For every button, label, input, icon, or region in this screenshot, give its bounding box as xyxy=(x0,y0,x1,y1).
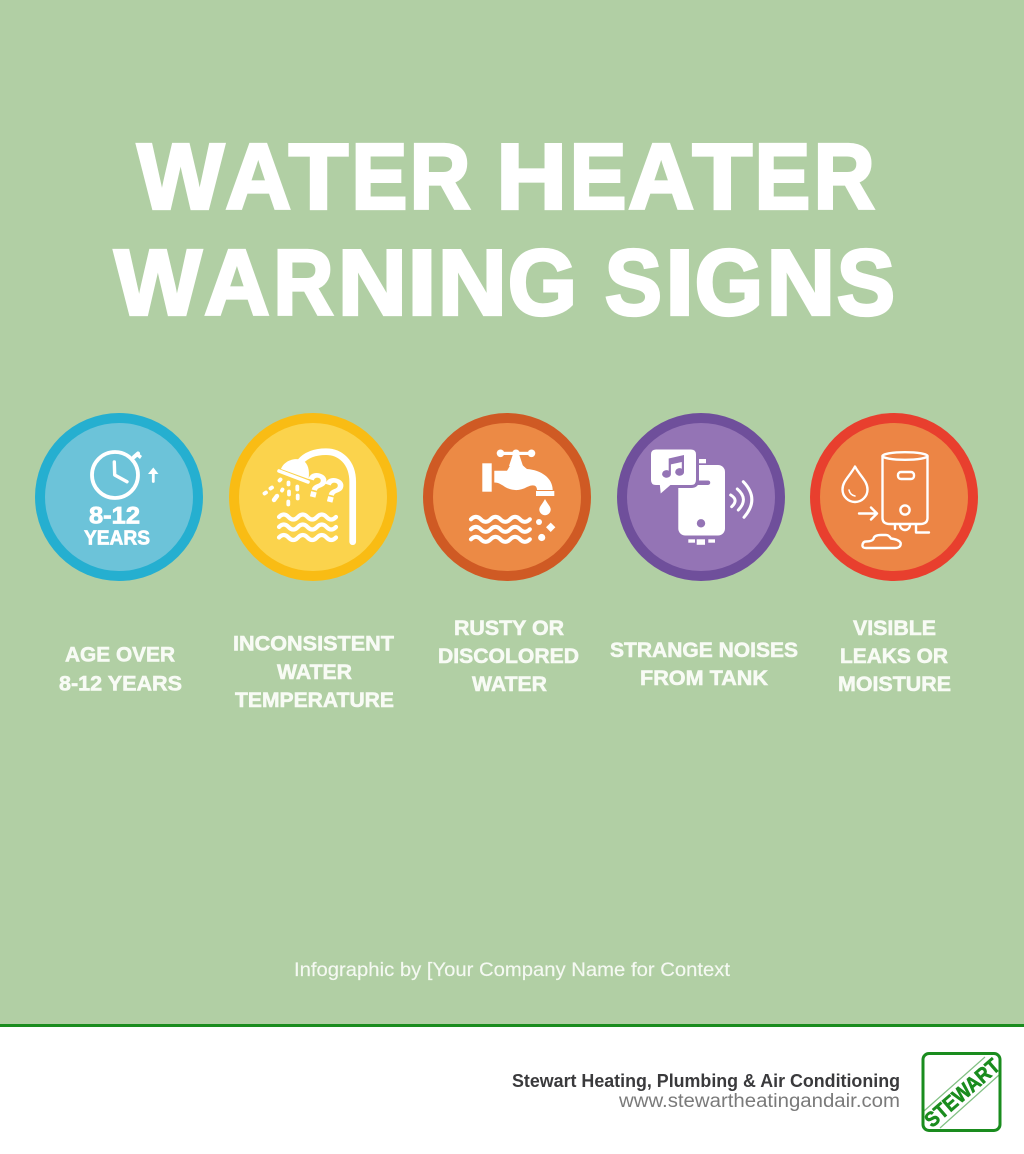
icon: leaking tank badge xyxy=(810,413,978,581)
label: inconsistent temperature: WATER xyxy=(277,660,352,684)
label: strange noises: STRANGE NOISES xyxy=(610,638,798,662)
label: strange noises xyxy=(610,638,798,690)
icon: age clock badge: YEARS xyxy=(84,527,150,549)
label: age: 8-12 YEARS xyxy=(59,672,182,696)
title: G xyxy=(695,230,763,334)
icon: rusty faucet badge xyxy=(423,413,591,581)
label: age xyxy=(59,643,182,696)
title: R xyxy=(273,230,334,334)
title: N xyxy=(767,230,835,334)
footer bar xyxy=(0,1024,1024,1154)
label: strange noises: FROM TANK xyxy=(640,666,768,690)
title: N xyxy=(338,230,407,334)
title: T xyxy=(692,124,752,228)
label: visible leaks: VISIBLE xyxy=(853,616,936,640)
icon: shower temperature badge xyxy=(229,413,397,581)
label: visible leaks: LEAKS OR xyxy=(840,644,948,668)
title: R xyxy=(410,124,470,228)
label: age: AGE OVER xyxy=(65,643,175,667)
title: E xyxy=(755,124,810,228)
label: rusty water: DISCOLORED xyxy=(438,644,579,668)
icon: age clock badge: 8-12 xyxy=(89,502,140,529)
label: visible leaks xyxy=(838,616,951,696)
title: H xyxy=(496,124,567,228)
title: T xyxy=(289,124,348,228)
label: visible leaks: MOISTURE xyxy=(838,672,951,696)
caption: Infographic by [Your Company Name for Context xyxy=(294,959,731,981)
title: W xyxy=(137,124,225,228)
label: inconsistent temperature: TEMPERATURE xyxy=(235,688,394,712)
title: S xyxy=(605,230,662,334)
title: S xyxy=(837,230,895,334)
label: rusty water xyxy=(438,616,579,696)
icon: shower temperature badge: ? xyxy=(301,465,331,507)
footer bar: Stewart Heating, Plumbing & Air Conditioning xyxy=(512,1071,900,1091)
title: R xyxy=(814,124,875,228)
title: A xyxy=(628,124,694,228)
label: inconsistent temperature: INCONSISTENT xyxy=(233,632,394,656)
icon: age clock badge xyxy=(35,413,203,581)
title: W xyxy=(114,230,202,334)
title: I xyxy=(665,230,694,334)
logo: STEWART xyxy=(920,1054,1005,1132)
title: E xyxy=(352,124,407,228)
title xyxy=(114,124,895,334)
icon: noisy tank badge xyxy=(617,413,785,581)
title: E xyxy=(570,124,626,228)
label: rusty water: RUSTY OR xyxy=(454,616,564,640)
footer bar: www.stewartheatingandair.com xyxy=(618,1091,900,1112)
label: rusty water: WATER xyxy=(472,672,547,696)
icon: shower temperature badge: ? xyxy=(318,470,348,512)
title: N xyxy=(438,230,507,334)
title: G xyxy=(508,230,577,334)
title: A xyxy=(226,124,291,228)
title: A xyxy=(204,230,270,334)
label: inconsistent temperature xyxy=(233,632,394,712)
title: I xyxy=(407,230,437,334)
